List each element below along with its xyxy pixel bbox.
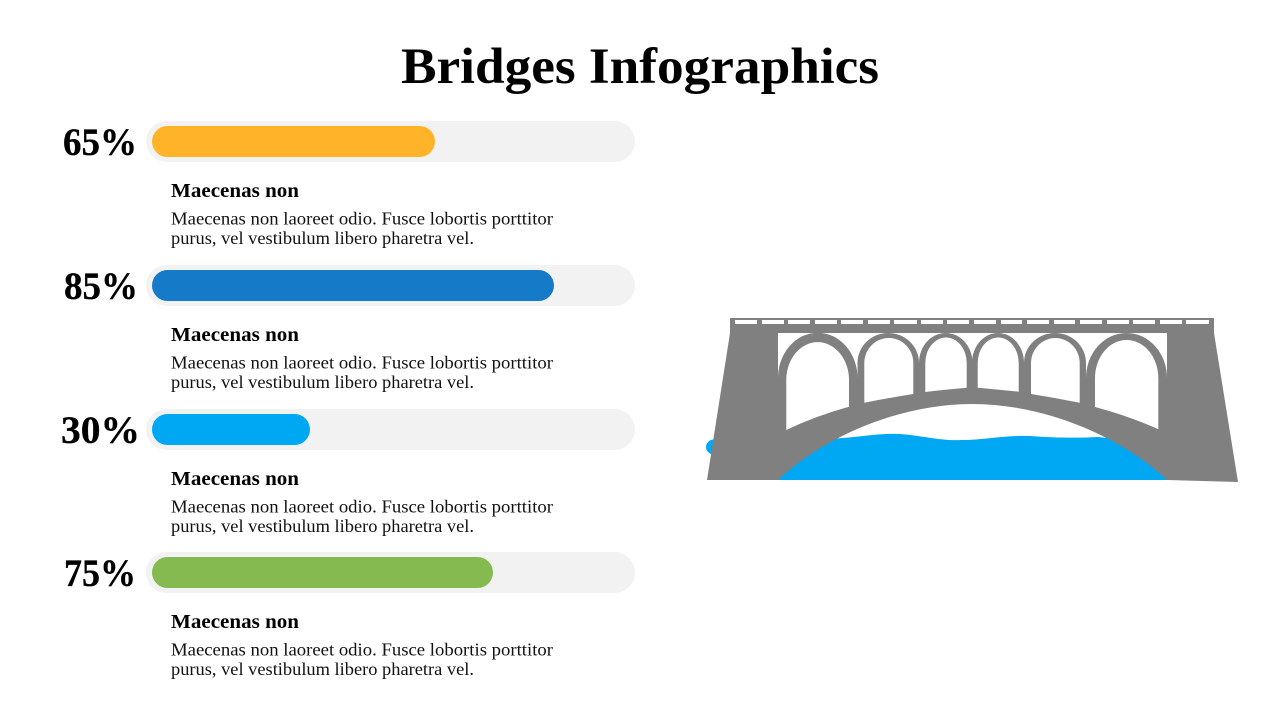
bridge structure [707, 318, 1238, 482]
percentage: 65%: 65% [63, 121, 137, 164]
body text: Maecenas non laoreet odio. Fusce lobortis porttitor [171, 640, 553, 660]
heading: Maecenas non [171, 180, 300, 202]
body text [171, 496, 553, 536]
body text: purus, vel vestibulum libero pharetra vel. [171, 372, 474, 392]
panel: row 3, 30% [61, 409, 635, 536]
progress fill [152, 270, 554, 301]
body text: purus, vel vestibulum libero pharetra vel. [171, 659, 474, 679]
percentage: 85%: 85% [64, 265, 138, 308]
body text [171, 352, 553, 392]
progress fill [152, 557, 493, 588]
body text [171, 640, 553, 679]
progress track [146, 552, 635, 593]
progress track [146, 121, 635, 162]
percentage: 75%: 75% [64, 552, 136, 595]
progress track [146, 409, 635, 450]
title: Bridges Infographics [401, 39, 879, 95]
percentage: 30%: 30% [61, 409, 140, 452]
panel: row 4, 75% [64, 552, 635, 679]
heading: Maecenas non [171, 611, 300, 633]
heading: Maecenas non [171, 468, 300, 490]
body text: Maecenas non laoreet odio. Fusce lobortis porttitor [171, 208, 553, 228]
body text: Maecenas non laoreet odio. Fusce lobortis porttitor [171, 352, 553, 372]
body text: Maecenas non laoreet odio. Fusce lobortis porttitor [171, 496, 553, 516]
body text [171, 208, 553, 248]
body text: purus, vel vestibulum libero pharetra vel. [171, 228, 474, 248]
panel: row 2, 85% [64, 265, 635, 392]
panel: row 1, 65% [63, 121, 635, 248]
progress fill [152, 126, 435, 157]
icon: arch bridge over water [706, 318, 1238, 482]
progress track [146, 265, 635, 306]
water [706, 434, 1175, 480]
progress fill [152, 414, 310, 445]
heading: Maecenas non [171, 324, 300, 346]
body text: purus, vel vestibulum libero pharetra vel. [171, 516, 474, 536]
